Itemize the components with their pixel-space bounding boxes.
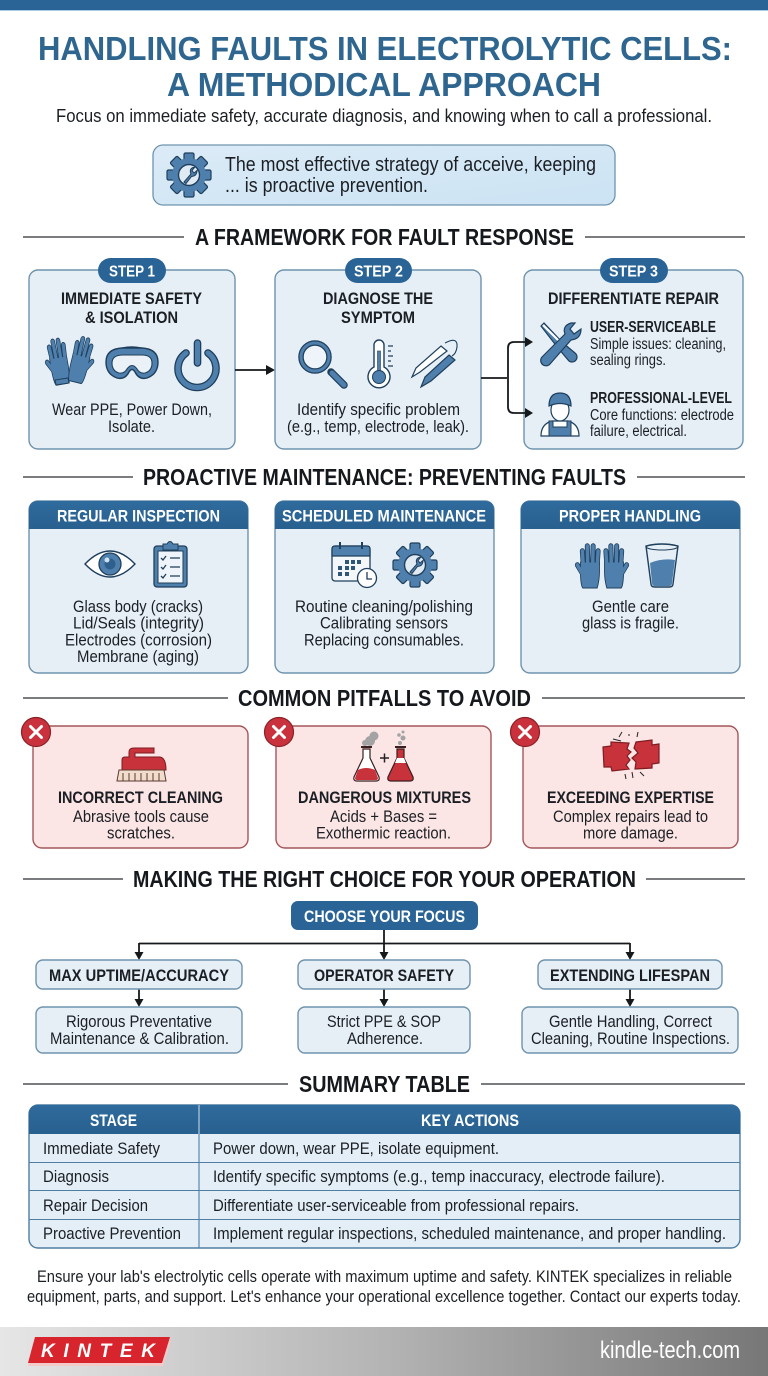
panel: scheduled maintenance <box>275 501 494 673</box>
top bar <box>0 0 768 11</box>
result: handling: Gentle Handling, Correct <box>549 1012 712 1031</box>
icon: broken part <box>603 732 659 779</box>
title <box>38 30 732 103</box>
professional-level text: PROFESSIONAL-LEVEL <box>590 390 732 407</box>
row: immediate safety: Immediate Safety <box>43 1139 160 1158</box>
step 1 text: Wear PPE, Power Down, <box>52 400 212 419</box>
badge: step 2 <box>345 258 412 283</box>
icon: x badge <box>22 718 50 746</box>
handling text <box>582 597 679 632</box>
title: HANDLING FAULTS IN ELECTROLYTIC CELLS: <box>38 30 732 67</box>
professional-level text <box>590 390 734 440</box>
tree connectors <box>134 930 634 1007</box>
step 2 heading: DIAGNOSE THE <box>323 289 433 308</box>
website: kindle-tech.com <box>600 1337 740 1364</box>
result: maintenance <box>36 1007 242 1053</box>
table header: STAGE <box>90 1111 137 1130</box>
result: ppe <box>298 1007 470 1053</box>
inspection list: Glass body (cracks) <box>73 597 203 616</box>
badge: step 2: STEP 2 <box>354 264 403 280</box>
user-serviceable text: Simple issues: cleaning, <box>590 336 726 353</box>
pitfall text: INCORRECT CLEANING <box>58 788 223 807</box>
maintenance list <box>295 597 473 650</box>
maintenance list: Routine cleaning/polishing <box>295 597 473 616</box>
subtitle: Focus on immediate safety, accurate diagnosis, and knowing when to call a professional. <box>56 106 712 126</box>
card header: PROPER HANDLING <box>559 506 701 526</box>
inspection list <box>65 597 212 666</box>
step 1 heading: & ISOLATION <box>85 308 178 327</box>
row: repair decision <box>43 1196 579 1215</box>
maintenance list: Calibrating sensors <box>320 614 448 632</box>
panel: proper handling <box>521 501 740 673</box>
closing text <box>27 1268 741 1306</box>
step 3 heading: DIFFERENTIATE REPAIR <box>548 289 719 308</box>
root node: choose your focus <box>291 901 478 930</box>
step 1 heading: IMMEDIATE SAFETY <box>61 289 203 308</box>
heading: common pitfalls: COMMON PITFALLS TO AVOID <box>238 685 531 711</box>
title: A METHODICAL APPROACH <box>167 66 601 103</box>
professional-level text: failure, electrical. <box>590 423 687 440</box>
badge: step 3 <box>600 258 668 283</box>
row: diagnosis: Diagnosis <box>43 1167 109 1186</box>
callout text <box>225 154 596 197</box>
icon: gear with wrench <box>167 153 211 197</box>
icon: clipboard <box>154 542 187 587</box>
pitfall text: more damage. <box>583 824 678 842</box>
step 2 text <box>287 400 469 436</box>
step 2 text: (e.g., temp, electrode, leak). <box>287 417 469 436</box>
panel: exceeding expertise <box>510 718 738 848</box>
footer <box>0 1327 768 1376</box>
icon: power <box>178 343 216 387</box>
card header: SCHEDULED MAINTENANCE <box>282 506 486 526</box>
card header <box>29 501 248 529</box>
inspection list: Lid/Seals (integrity) <box>73 614 204 632</box>
icon: gloved hands <box>577 546 627 588</box>
professional-level text: Core functions: electrode <box>590 407 734 424</box>
step 1 text <box>52 400 212 436</box>
icon: thermometer <box>368 340 393 388</box>
icon: goggles <box>106 347 158 378</box>
logo: kintek: KINTEK <box>41 1341 156 1362</box>
heading: framework: A FRAMEWORK FOR FAULT RESPONSE <box>195 224 574 250</box>
row: diagnosis <box>43 1167 665 1186</box>
inspection list: Electrodes (corrosion) <box>65 630 212 650</box>
badge: step 3: STEP 3 <box>609 264 658 280</box>
option: operator safety <box>298 960 470 989</box>
callout <box>153 145 615 205</box>
option: operator safety: OPERATOR SAFETY <box>314 966 455 985</box>
inspection list: Membrane (aging) <box>77 647 199 666</box>
heading: making the right choice: MAKING THE RIGHT CHOICE FOR YOUR OPERATION <box>133 866 636 892</box>
handling text: Gentle care <box>592 597 669 616</box>
arrow: step 2 branching to step 3 <box>481 337 533 418</box>
panel: step 2 <box>275 258 481 449</box>
step 2 text: Identify specific problem <box>297 400 460 419</box>
pitfall text: Complex repairs lead to <box>553 807 708 826</box>
result: maintenance: Rigorous Preventative <box>66 1012 212 1031</box>
icon: eye <box>85 551 135 577</box>
step 1 heading <box>61 289 203 327</box>
icon: calendar and clock <box>332 542 376 588</box>
icon: gear with wrench <box>393 543 437 587</box>
row: repair decision: Repair Decision <box>43 1196 148 1215</box>
badge: step 1 <box>98 258 166 283</box>
table header <box>29 1105 740 1134</box>
pitfall text: Acids + Bases = <box>330 807 437 826</box>
pitfall text: DANGEROUS MIXTURES <box>298 788 471 807</box>
icon: technician <box>541 393 579 436</box>
callout text: ... is proactive prevention. <box>225 175 428 197</box>
pitfall text <box>298 788 471 842</box>
row: repair decision: Differentiate user-serviceable from professional repairs. <box>213 1196 579 1215</box>
option: extending lifespan: EXTENDING LIFESPAN <box>550 966 710 985</box>
row: diagnosis: Identify specific symptoms (e.g., temp inaccuracy, electrode failure). <box>213 1167 665 1186</box>
icon: glass of water <box>646 544 678 587</box>
panel: regular inspection <box>29 501 248 673</box>
user-serviceable text: sealing rings. <box>590 352 666 369</box>
icon: magnifier <box>301 343 344 385</box>
table header: KEY ACTIONS <box>421 1111 519 1130</box>
panel: step 3 <box>524 258 743 449</box>
summary table <box>29 1105 740 1248</box>
result: maintenance: Maintenance & Calibration. <box>50 1029 229 1048</box>
icon: gloves <box>44 338 97 386</box>
icon: electrode pens <box>412 340 457 387</box>
pitfall text <box>58 788 223 842</box>
pitfall text <box>547 788 714 842</box>
result: handling: Cleaning, Routine Inspections. <box>531 1029 730 1048</box>
root node: choose your focus: CHOOSE YOUR FOCUS <box>304 908 465 926</box>
badge: step 1: STEP 1 <box>109 264 155 280</box>
row: proactive prevention: Proactive Prevention <box>43 1224 181 1243</box>
panel: step 1 <box>29 258 235 449</box>
user-serviceable text <box>590 319 726 369</box>
step 2 heading: SYMPTOM <box>341 308 415 327</box>
result: ppe: Adherence. <box>347 1029 423 1048</box>
icon: scrub brush <box>117 748 166 781</box>
option: max uptime <box>36 960 242 989</box>
result: handling <box>522 1007 738 1053</box>
card header: REGULAR INSPECTION <box>57 506 220 526</box>
icon: x badge <box>510 718 540 746</box>
result: ppe: Strict PPE & SOP <box>327 1012 441 1031</box>
maintenance list: Replacing consumables. <box>304 630 464 650</box>
decision tree <box>36 901 738 1053</box>
handling text: glass is fragile. <box>582 614 679 632</box>
pitfall text: scratches. <box>107 824 175 842</box>
pitfall text: Abrasive tools cause <box>73 807 209 826</box>
pitfall text: Exothermic reaction. <box>316 824 451 842</box>
row: immediate safety <box>43 1139 499 1158</box>
panel: dangerous mixtures <box>264 718 491 848</box>
card header <box>275 501 494 529</box>
option: extending lifespan <box>538 960 722 989</box>
icon: flasks and smoke <box>354 730 413 781</box>
arrow: step 1 to step 2 <box>235 365 275 375</box>
step 1 text: Isolate. <box>108 417 155 436</box>
option: max uptime: MAX UPTIME/ACCURACY <box>49 966 230 985</box>
user-serviceable text: USER-SERVICEABLE <box>590 319 716 336</box>
icon: wrench and screwdriver <box>541 323 581 366</box>
icon: x badge <box>264 718 294 746</box>
card header <box>521 501 740 529</box>
row: immediate safety: Power down, wear PPE, isolate equipment. <box>213 1139 499 1158</box>
heading: summary table: SUMMARY TABLE <box>299 1071 470 1097</box>
pitfall text: EXCEEDING EXPERTISE <box>547 788 714 807</box>
panel: incorrect cleaning <box>22 718 248 848</box>
callout text: The most effective strategy of acceive, keeping <box>225 154 596 176</box>
step 2 heading <box>323 289 433 327</box>
logo: kintek <box>28 1337 171 1366</box>
heading: proactive maintenance: PROACTIVE MAINTENANCE: PREVENTING FAULTS <box>143 464 626 490</box>
